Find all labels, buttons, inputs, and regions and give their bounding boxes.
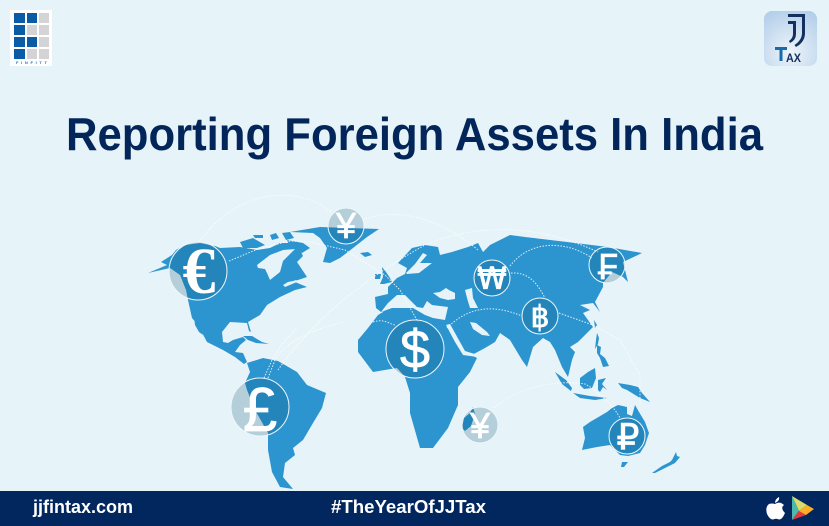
map: Eurasia — [375, 235, 642, 377]
map: Sulawesi — [598, 378, 607, 392]
currency: won: ₩ — [477, 262, 507, 297]
icon: apple — [766, 497, 785, 520]
currency: ruble: ₽ — [617, 417, 639, 458]
map: Madagascar — [462, 407, 475, 431]
map: New Zealand — [652, 452, 680, 473]
currency: pound: £ — [243, 376, 277, 445]
map: Arctic islands — [240, 232, 310, 253]
currency: euro: € — [182, 235, 216, 308]
currency: ruble — [609, 417, 645, 458]
map: Philippines — [597, 345, 609, 367]
map: Baja California — [194, 317, 203, 335]
currency: dollar: $ — [400, 320, 430, 380]
currency: franc — [589, 246, 625, 287]
map: Cuba and Caribbean — [243, 336, 269, 344]
logo: Finfitt — [10, 10, 52, 66]
currency: yen top — [328, 205, 364, 246]
currency: franc: ₣ — [598, 246, 618, 287]
map: Africa — [358, 306, 477, 448]
footer hashtag: #TheYearOfJJTax — [331, 497, 486, 517]
map: South America — [245, 358, 326, 489]
map: New Guinea — [618, 383, 650, 402]
world map — [148, 227, 680, 489]
map: Japan — [594, 320, 599, 349]
currency: yen bottom — [462, 405, 498, 446]
map: British Isles — [375, 267, 392, 284]
currency: yen top: ¥ — [335, 205, 357, 246]
logo: JJ Tax — [764, 11, 817, 66]
currency: yen bottom: ¥ — [469, 405, 491, 446]
currency: dollar — [386, 320, 444, 380]
map: North America — [148, 243, 307, 364]
currency: euro — [169, 235, 227, 308]
seas — [257, 249, 490, 357]
footer website: jjfintax.com — [32, 497, 133, 517]
icon: google play — [792, 496, 814, 520]
currency: baht — [522, 298, 558, 335]
currency: baht: ฿ — [530, 300, 550, 335]
footer bar — [0, 491, 829, 526]
currency: pound — [231, 376, 289, 445]
map: Sumatra and Java — [555, 372, 607, 400]
map: Iceland — [360, 252, 372, 257]
title: Reporting Foreign Assets In India — [66, 108, 763, 160]
map: Greenland — [290, 227, 379, 263]
logo: JJ Tax: AX — [786, 51, 801, 65]
map: Australia — [582, 405, 649, 456]
logo: Finfitt: FINFITT — [16, 60, 48, 65]
map: Borneo — [580, 368, 596, 389]
flight arcs — [199, 195, 640, 418]
map: Tasmania — [621, 462, 628, 467]
